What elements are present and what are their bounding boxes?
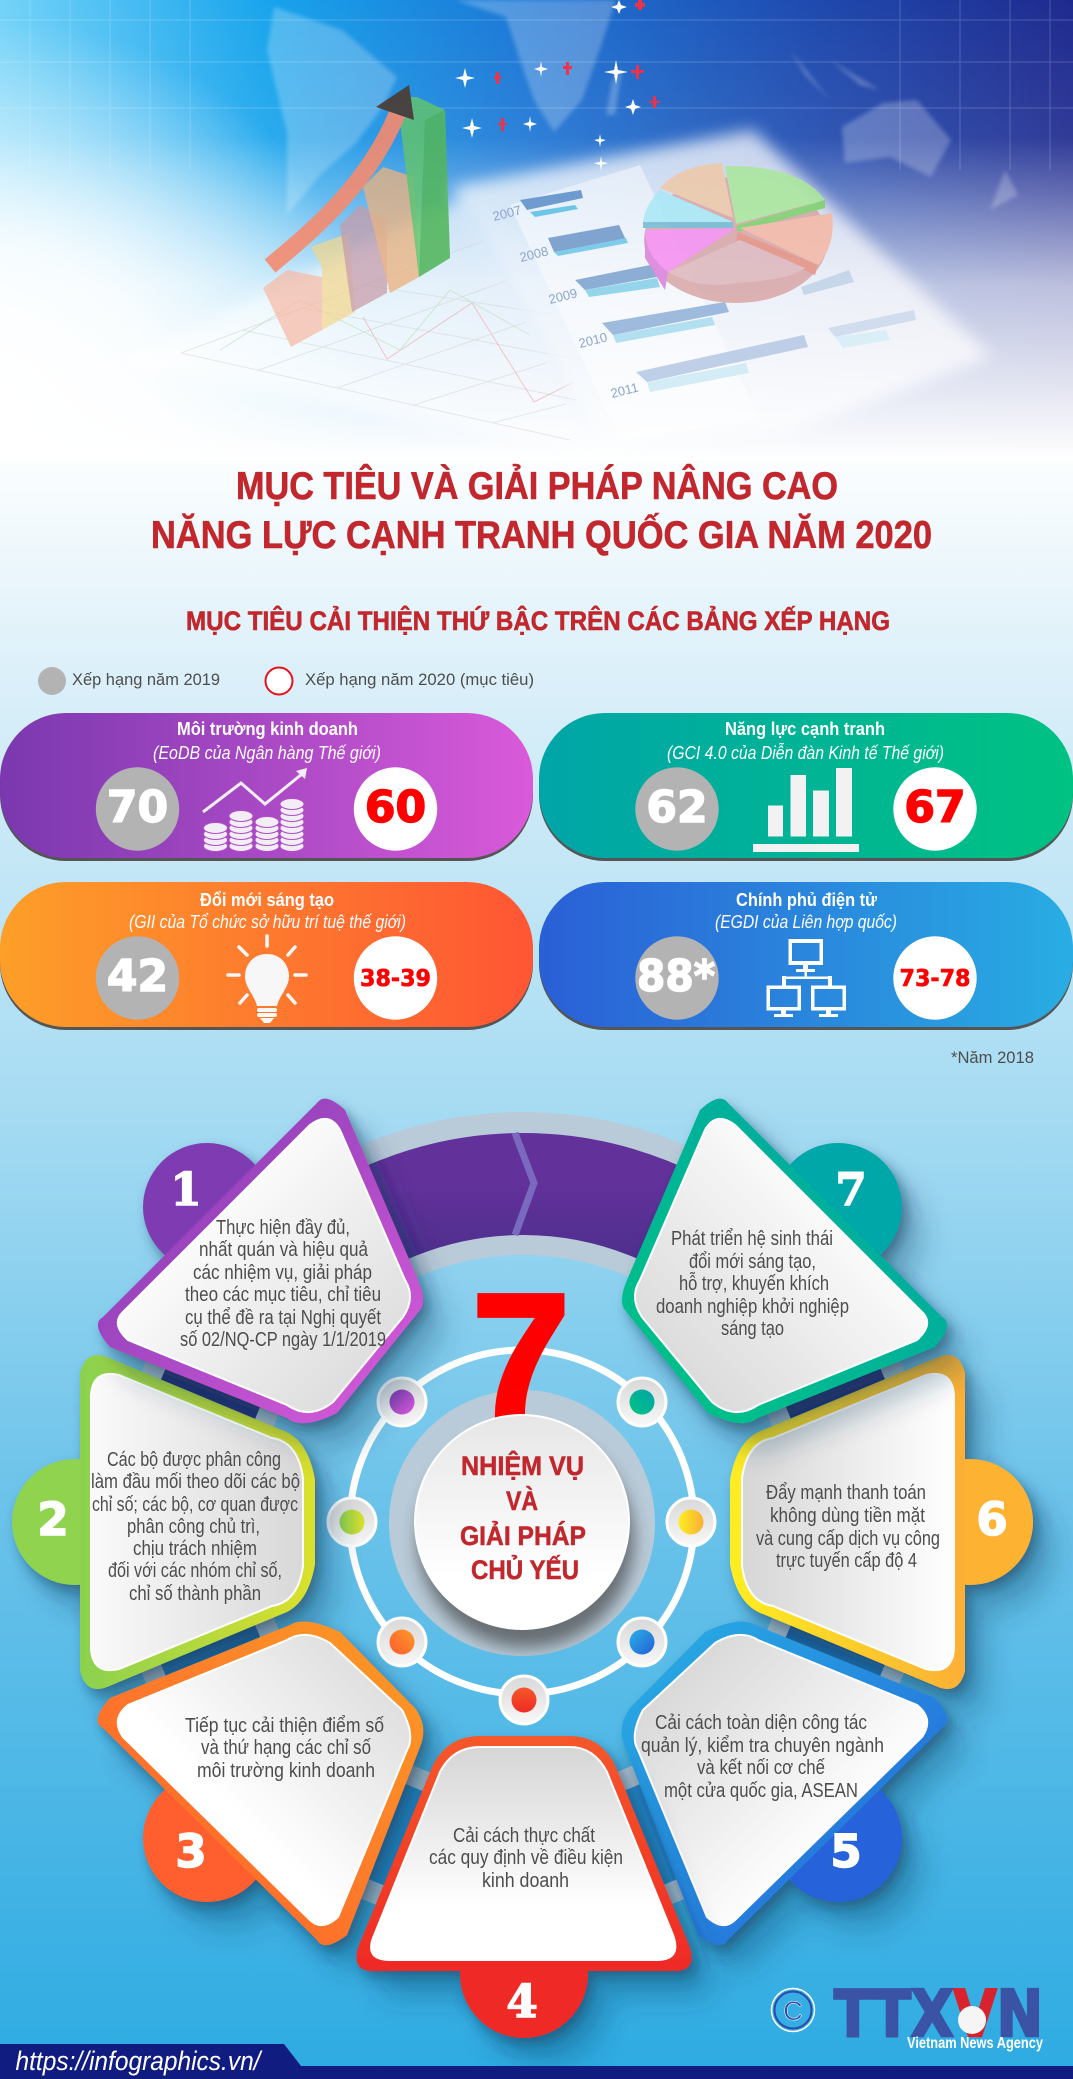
year labels: 2010 [577, 329, 609, 351]
rank 2019: 62 [646, 782, 708, 833]
panel: task 7: doanh nghiệp khởi nghiệp [656, 1296, 849, 1318]
rank 2019: 42 [107, 951, 168, 1002]
rank 2019: 70 [107, 782, 168, 833]
hub label: VÀ [506, 1485, 538, 1516]
panel: task 3: 3 [175, 1825, 207, 1878]
panel: task 5: và kết nối cơ chế [697, 1757, 825, 1779]
panel: task 2: chỉ số thành phần [129, 1583, 261, 1605]
icon: bar chart [753, 768, 859, 852]
panel: task 3: Tiếp tục cải thiện điểm số [185, 1715, 384, 1737]
panel: task 5 [622, 1622, 947, 1945]
panel: năng lực cạnh tranh [539, 713, 1073, 861]
panel: task 7: đổi mới sáng tạo, [689, 1251, 816, 1273]
panel: task 4: 4 [506, 1975, 538, 2028]
panel: năng lực cạnh tranh: (GCI 4.0 của Diễn đàn Kinh tế Thế giới) [667, 743, 944, 763]
panel: chính phủ điện tử: Chính phủ điện tử [736, 890, 878, 910]
panel: đổi mới sáng tạo: Đổi mới sáng tạo [200, 890, 334, 910]
panel: task 6: trực tuyến cấp độ 4 [776, 1550, 917, 1572]
outer segmented ring [184, 1133, 862, 1860]
3D bar chart and arrow [263, 85, 450, 347]
panel: task 2: phân công chủ trì, [127, 1516, 260, 1538]
copyright mark: C [783, 1996, 803, 2026]
year labels [491, 202, 640, 401]
panel: task 1: 1 [170, 1163, 202, 1216]
panel: môi trường kinh doanh: (EoDB của Ngân hàng Thế giới) [153, 743, 381, 763]
panel: task 3: và thứ hạng các chỉ số [201, 1737, 371, 1759]
rank 2019 [96, 767, 179, 851]
hub label: GIẢI PHÁP [460, 1519, 586, 1551]
panel: đổi mới sáng tạo: (GII của Tổ chức sở hữu trí tuệ thế giới) [129, 912, 406, 932]
panel: task 2 [12, 1355, 315, 1689]
panel: task 4 [356, 1736, 692, 2038]
legend: Xếp hạng năm 2020 (mục tiêu) [305, 670, 534, 689]
footer bar: https://infographics.vn/ [16, 2046, 263, 2076]
panel: task 3: môi trường kinh doanh [197, 1760, 375, 1782]
panel: môi trường kinh doanh [0, 713, 533, 861]
panel: task 1: các nhiệm vụ, giải pháp [193, 1262, 372, 1284]
panel: task 6: 6 [976, 1493, 1008, 1546]
map continents [267, 0, 1018, 215]
year labels: 2009 [547, 285, 579, 307]
panel: task 4: Cải cách thực chất [453, 1825, 595, 1847]
icon: computer network [766, 939, 846, 1017]
panel: task 2: 2 [37, 1493, 69, 1546]
panel: task 1 [98, 1099, 423, 1423]
rank 2020: 60 [365, 782, 426, 833]
panel: đổi mới sáng tạo [0, 882, 533, 1030]
logo: TTXVN: Vietnam News Agency [907, 2035, 1043, 2052]
rank 2020 [893, 767, 977, 851]
rank 2020: 73-78 [900, 966, 970, 992]
title: MỤC TIÊU VÀ GIẢI PHÁP NÂNG CAO [236, 464, 838, 508]
panel: task 6: Đẩy mạnh thanh toán [766, 1482, 926, 1504]
rank 2019: 88* [637, 951, 715, 1002]
panel: task 7: 7 [835, 1163, 867, 1216]
title: NĂNG LỰC CẠNH TRANH QUỐC GIA NĂM 2020 [151, 512, 932, 557]
panel: chính phủ điện tử [539, 882, 1073, 1030]
panel: task 7 [622, 1099, 947, 1423]
panel: task 6: và cung cấp dịch vụ công [756, 1528, 940, 1550]
panel: task 6 [730, 1355, 1033, 1689]
panel: task 2: đối với các nhóm chỉ số, [108, 1560, 282, 1582]
panel: môi trường kinh doanh: Môi trường kinh doanh [177, 719, 358, 739]
panel: task 5: Cải cách toàn diện công tác [655, 1712, 867, 1734]
panel: task 1: số 02/NQ-CP ngày 1/1/2019 [180, 1329, 386, 1351]
legend [38, 667, 534, 695]
panel: task 3 [98, 1622, 423, 1945]
icon: coins and rising line [203, 768, 307, 852]
footer bar [0, 2044, 1073, 2079]
big number 7: 7 [472, 1259, 570, 1454]
panel: năng lực cạnh tranh: Năng lực cạnh tranh [725, 719, 885, 739]
footnote: *Năm 2018 [951, 1048, 1034, 1067]
panel: task 5: 5 [830, 1825, 862, 1878]
hub label [460, 1450, 586, 1585]
rank 2020 [893, 936, 977, 1020]
panel: task 5: quản lý, kiểm tra chuyên ngành [641, 1735, 884, 1757]
rank 2020: 67 [904, 782, 966, 833]
rank 2019 [635, 936, 719, 1020]
panel: task 4: kinh doanh [482, 1870, 569, 1892]
sparkles [455, 0, 641, 171]
panel: task 2: làm đầu mối theo dõi các bộ [91, 1471, 300, 1493]
copyright mark [772, 1988, 814, 2032]
hub label: CHỦ YẾU [471, 1553, 579, 1585]
year labels: 2011 [609, 380, 640, 401]
rank 2020: 38-39 [360, 966, 431, 992]
year labels: 2008 [518, 243, 550, 265]
panel: task 1: Thực hiện đầy đủ, [216, 1217, 350, 1239]
panel: task 4: các quy định về điều kiện [429, 1847, 623, 1869]
panel: chính phủ điện tử: (EGDI của Liên hợp quốc) [715, 912, 897, 932]
rank 2019 [635, 767, 719, 851]
panel: task 6: không dùng tiền mặt [770, 1505, 925, 1527]
right paper [452, 130, 992, 453]
left paper chart [120, 197, 602, 457]
legend: Xếp hạng năm 2019 [72, 670, 220, 689]
year labels: 2007 [491, 202, 523, 224]
panel: task 2: chỉ số; các bộ, cơ quan được [92, 1494, 298, 1516]
panel: task 5: một cửa quốc gia, ASEAN [664, 1780, 858, 1802]
header illustration [0, 0, 1073, 460]
hub label: NHIỆM VỤ [461, 1450, 584, 1481]
rank 2020 [354, 936, 437, 1020]
horizontal bars [520, 190, 916, 392]
panel: task 2: Các bộ được phân công [107, 1449, 281, 1471]
panel: task 1: nhất quán và hiệu quả [199, 1239, 369, 1261]
pie chart [643, 163, 833, 303]
node dots [328, 1378, 715, 1724]
panel: task 1: theo các mục tiêu, chỉ tiêu [185, 1284, 381, 1306]
section heading: MỤC TIÊU CẢI THIỆN THỨ BẬC TRÊN CÁC BẢNG XẾP HẠNG [186, 604, 890, 636]
connecting white ring [350, 1350, 694, 1694]
panel: task 7: hỗ trợ, khuyến khích [679, 1272, 829, 1295]
panel: task 1: cụ thể đề ra tại Nghị quyết [185, 1307, 381, 1329]
panel: task 7: sáng tạo [721, 1318, 784, 1340]
title [151, 464, 932, 557]
icon: light bulb [228, 936, 306, 1023]
panel: task 2: chịu trách nhiệm [133, 1538, 257, 1560]
panel: task 7: Phát triển hệ sinh thái [671, 1228, 833, 1250]
rank 2020 [354, 767, 437, 851]
logo: TTXVN: TTXVN [834, 1978, 1043, 2052]
centre hub [350, 1259, 694, 1694]
rank 2019 [96, 936, 179, 1020]
